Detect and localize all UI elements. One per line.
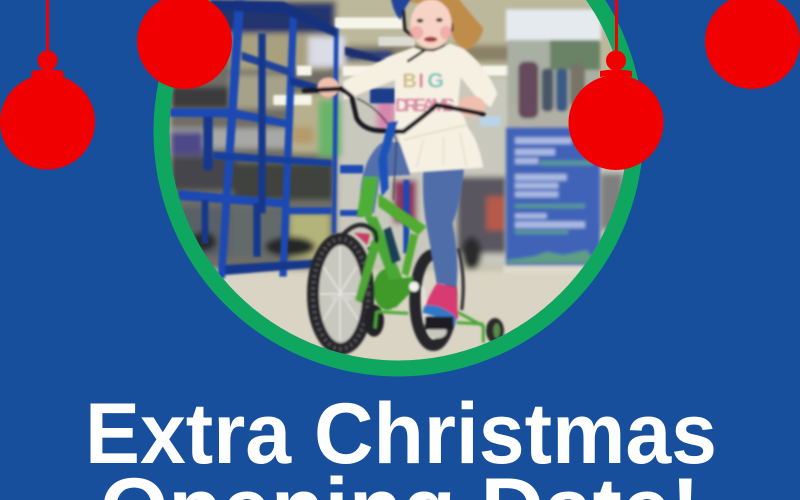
blue bike tag bbox=[378, 121, 398, 197]
bauble upper left bbox=[137, 0, 232, 89]
ceiling lights bbox=[273, 17, 511, 126]
bauble left bbox=[0, 0, 95, 170]
baubles bbox=[0, 0, 800, 170]
helmet bbox=[391, 0, 415, 20]
rear wheel and mudguard bbox=[415, 248, 463, 345]
bauble right bbox=[568, 0, 664, 170]
front wheel bbox=[312, 239, 380, 349]
dress bbox=[343, 43, 497, 173]
green photo ring bbox=[162, 0, 636, 368]
shirt lettering: I bbox=[418, 70, 424, 92]
shirt lettering: G bbox=[427, 68, 444, 92]
shirt lettering bbox=[395, 68, 455, 116]
title: Extra Christmas bbox=[85, 386, 717, 482]
blue shelving bbox=[170, 0, 409, 278]
bauble upper right bbox=[705, 0, 800, 89]
shoe bbox=[423, 283, 458, 329]
warehouse background bbox=[170, 0, 624, 360]
hands bbox=[317, 77, 339, 97]
green bicycle frame bbox=[343, 177, 427, 310]
shirt lettering: DREAMS bbox=[395, 95, 455, 116]
shirt lettering: B bbox=[402, 70, 417, 92]
training wheels bbox=[364, 282, 504, 343]
face bbox=[410, 0, 452, 49]
handlebars bbox=[304, 89, 483, 132]
far leg bbox=[360, 142, 410, 213]
roller banner bbox=[503, 9, 601, 274]
near leg bbox=[423, 168, 464, 287]
child and bicycle bbox=[304, 0, 504, 349]
hair bbox=[408, 0, 483, 50]
photo: child riding a green bike in a warehouse bbox=[170, 0, 624, 360]
brake cable bbox=[357, 98, 397, 200]
